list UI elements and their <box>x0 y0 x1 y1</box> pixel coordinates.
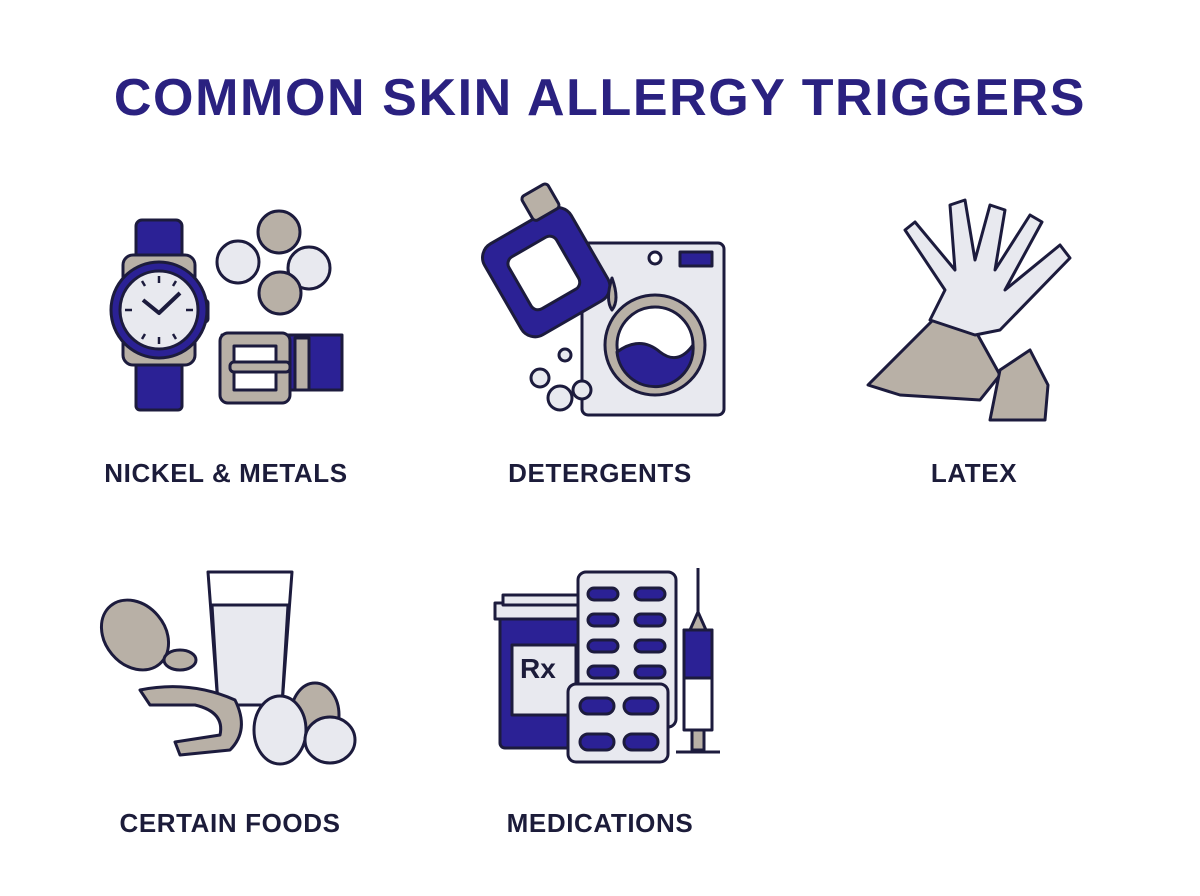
label: latex: LATEX <box>931 458 1017 488</box>
label: nickel & metals: NICKEL & METALS <box>104 458 348 488</box>
label: certain foods: CERTAIN FOODS <box>119 808 341 838</box>
label: medications: MEDICATIONS <box>507 808 693 838</box>
icon: nickel & metals <box>111 211 342 410</box>
icon: certain foods <box>88 572 355 764</box>
icon: medications: Rx <box>520 653 556 684</box>
icon: detergents <box>464 180 724 415</box>
title: COMMON SKIN ALLERGY TRIGGERS <box>114 69 1086 127</box>
icon: medications <box>495 568 720 762</box>
icon: latex <box>868 200 1070 420</box>
label: detergents: DETERGENTS <box>508 458 692 488</box>
